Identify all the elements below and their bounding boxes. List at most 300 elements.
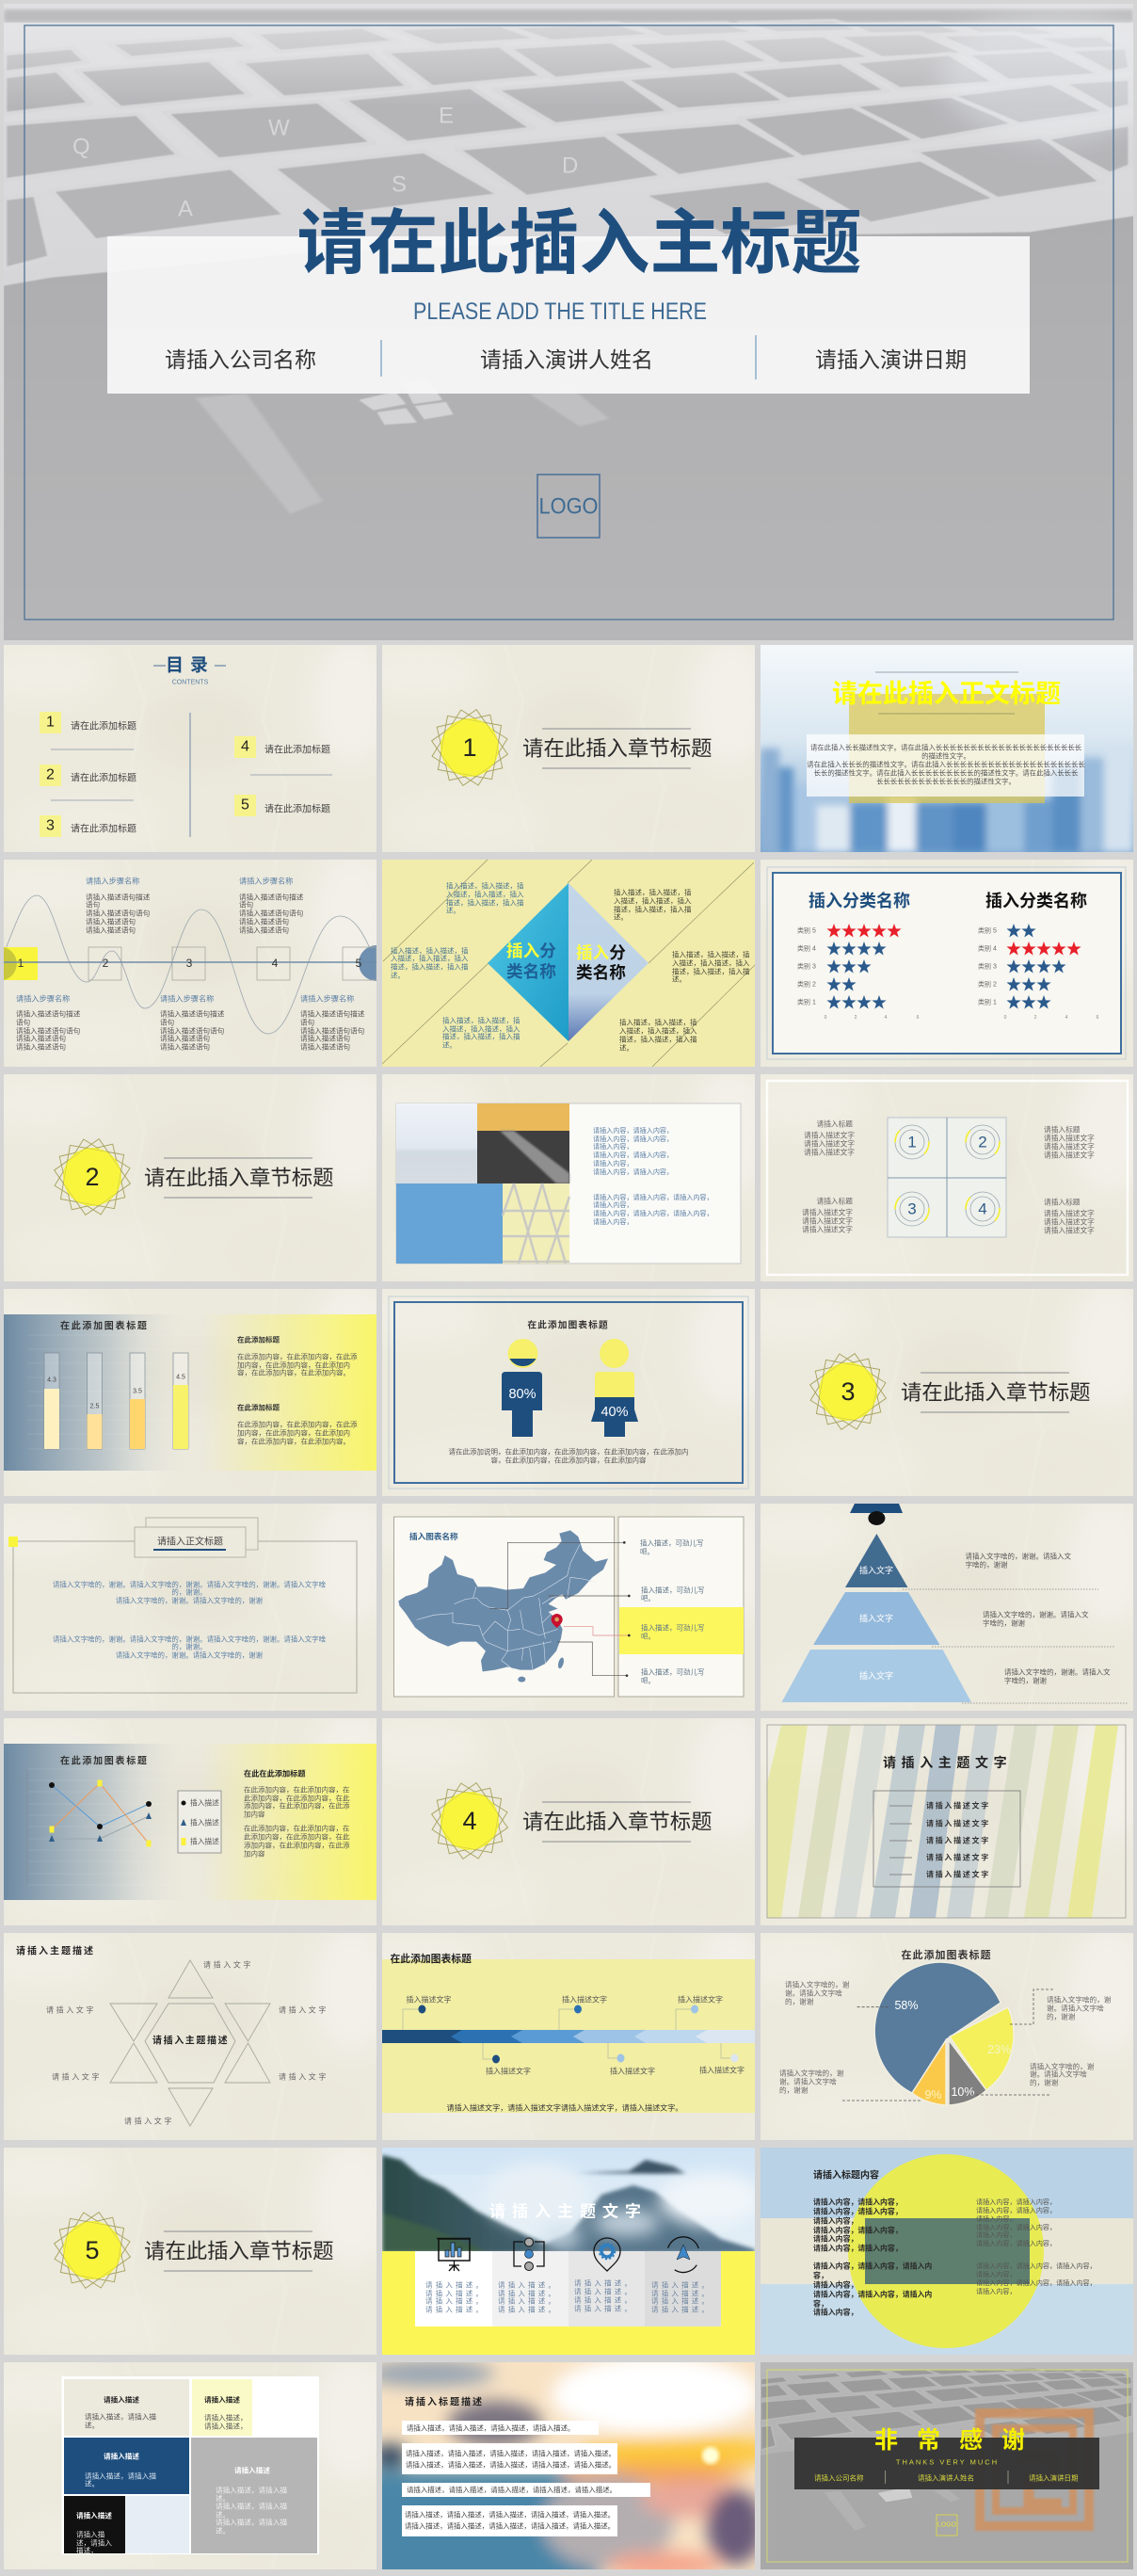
wave line [4,895,376,1034]
description blocks: 插入描述，插入描述，插 [446,881,524,891]
contents items: 请在此添加标题 [264,802,330,815]
side text: 添加内容，在此添加内容，在此添 [244,1800,350,1810]
icon: navigation cycle [666,2234,702,2275]
milestones [403,1994,745,2075]
map title: 插入图表名称 [409,1531,458,1541]
highlight block [619,1607,744,1654]
map callouts: 插入描述，可劲儿写 [641,1666,704,1676]
step text blocks: 请插入描述语句 [300,1034,350,1043]
leader lines [903,1589,1129,1703]
card text: 请插入描述。 [574,2286,634,2295]
side text: 容，在此添加内容，在此添加内容。 [237,1367,350,1377]
pyramid levels: 插入文字 [859,1613,893,1623]
rating chart: left: 插入分类名称 [809,892,910,910]
description blocks: 述。 [619,1043,633,1053]
panel: framed body text [0,1494,394,1711]
card text [425,2278,712,2314]
side text: 此添加内容，在此添加内容，在此 [244,1793,350,1802]
callout text: 请插入文字啥的，谢 [779,2068,844,2077]
block: grey: 述。 [216,2510,230,2520]
photo tiles [396,1103,569,1264]
side text: 添加内容，在此添加内容，在此添 [244,1840,350,1849]
panel: diagonal stripes list [732,1709,1137,1925]
rating chart: right: 类别 2 [978,979,997,989]
contents items: 5 [241,797,249,813]
point labels: 请插入文字 [46,2005,96,2015]
description blocks: 入描述，插入描述，插入 [391,953,469,962]
right text: 请插入内容，请插入内容，请插入内容， [976,2278,1097,2287]
section title: 请在此插入章节标题 [144,2239,334,2263]
block: pale yellow: 请插入描述 [204,2395,240,2405]
contents items: 请在此添加标题 [264,744,330,755]
right text: 请插入内容，请插入内容， [976,2198,1056,2206]
right text: 请插入内容， [976,2230,1017,2239]
quadrant labels: 请插入标题 [1044,1198,1081,1207]
block: navy: 请插入描述，请插入描 [85,2471,156,2480]
list box: 请插入描述文字 [926,1853,990,1862]
cards [415,2251,721,2326]
step text blocks: 语句 [239,900,253,910]
text rows: 请插入描述，请插入描述，请插入描述，请插入描述，请插入描述。 [407,2485,617,2494]
title card [107,236,1030,394]
milestones: 插入描述文字 [678,1994,723,2004]
photo: laptop keyboard: S [392,171,407,198]
left text: 请插入内容， [813,2280,857,2290]
step text blocks [16,876,365,1051]
card text: 请插入描述。 [425,2305,486,2314]
rating chart: left: 类别 1 [797,998,816,1006]
block: grey: 请插入描述，请插入描 [216,2501,287,2510]
callout leaders [842,1989,1055,2101]
chart title: 在此添加图表标题 [527,1318,609,1331]
left text: 请插入内容，请插入内容， [813,2243,903,2252]
thanks subtitle: THANKS VERY MUCH [896,2457,999,2467]
step text blocks: 请插入描述语句语句 [160,1026,224,1036]
card text: 请插入描述。 [425,2295,486,2305]
legend: 插入描述 [190,1836,219,1845]
callout text: 的，谢谢 [785,1996,814,2005]
level descriptions: 字啥的，谢谢 [966,1559,1008,1569]
text blocks: 请插入内容，请插入内容，请插入内容， [593,1209,713,1217]
side text: 在此添加内容，在此添加内容，在 [244,1785,350,1795]
step text blocks: 请插入描述语句 [300,1041,350,1051]
quadrant labels: 请插入描述文字 [1044,1226,1095,1235]
panel: hexagram [0,1924,394,2140]
right text: 请插入内容， [976,2214,1017,2223]
hexagram outline [110,1960,270,2126]
quadrant labels: 请插入标题 [817,1196,853,1205]
body text: 请在此插入长长描述性文字。请在此插入长长长长长长长长长长长长长长长长长长长长长 [810,744,1082,751]
block: grey: 请插入描述 [234,2465,270,2474]
card text: 请插入描述。 [651,2280,712,2290]
body text [807,744,1085,785]
figure: female 40% [591,1339,638,1437]
panel: mountain icons [382,2148,763,2355]
text rows [402,2421,650,2536]
rating chart: left: 4 [885,1015,888,1021]
block: pale yellow: 请插入描述， [204,2422,248,2431]
card text: 请插入描述。 [498,2288,558,2297]
block: grey: 请插入描述，请插入描 [216,2486,287,2495]
contents items [40,712,332,837]
section title: 请在此插入章节标题 [144,1166,334,1190]
callout text: 请插入文字啥的，谢 [1030,2062,1095,2071]
block: pale blue [125,2496,189,2553]
left text: 容， [813,2271,828,2280]
card text: 请插入描述。 [651,2295,712,2305]
badge: number 4 [432,1783,507,1859]
rating chart: left: 0 [825,1015,827,1021]
description blocks: 入描述，插入描述，插入 [619,1026,697,1036]
heading: contents: CONTENTS [172,680,209,685]
block: paper: 述。 [85,2420,99,2429]
rating chart: left [797,892,920,1021]
contents items: 请在此添加标题 [71,719,136,733]
block: navy: 请插入描述 [104,2452,139,2461]
side text: 在此添加标题 [237,1335,280,1344]
block: grey [191,2438,317,2553]
diamond graphic: 类名称 [576,963,626,982]
step text blocks: 语句 [300,1017,314,1026]
text rows: 请插入描述，请插入描述，请插入描述，请插入描述，请插入描述。 [405,2521,615,2531]
callout text: 谢。请插入文字啥 [785,1988,842,1998]
presenter details: 请插入公司名称 [814,2472,864,2482]
step text blocks: 语句 [160,1017,174,1026]
description blocks [391,881,750,1053]
rating chart: left: 类别 3 [797,962,816,970]
heading: contents: 目录 [166,655,215,676]
step text blocks: 请插入描述语句描述 [239,893,304,902]
step text blocks: 请插入描述语句语句 [16,1026,80,1036]
map callouts: 插入描述，可劲儿写 [641,1623,704,1633]
chart title: 在此添加图表标题 [60,1755,149,1766]
quadrant grid: 1 [907,1134,917,1151]
milestones: 插入描述文字 [610,2066,655,2075]
text blocks: 请插入内容，请插入内容， [593,1151,673,1159]
text blocks: 请插入内容，请插入内容， [593,1126,673,1135]
callout text: 谢。请插入文字啥 [1030,2069,1087,2079]
presenter details: 请插入演讲日期 [815,347,967,372]
card text: 请插入描述。 [651,2305,712,2314]
card text: 请插入描述。 [574,2295,634,2305]
badge: number 4: 4 [462,1807,477,1835]
text block: 的，谢谢。 [171,1587,207,1597]
presenter details [165,335,967,379]
text rows: 请插入描述，请插入描述，请插入描述，请插入描述，请插入描述。 [406,2459,616,2469]
panel: sunset text rows [363,2356,787,2576]
side text: 在此添加标题 [237,1403,280,1412]
quadrant labels: 请插入描述文字 [804,1130,855,1139]
text blocks: 请插入内容， [593,1217,633,1226]
side text: 加内容 [244,1810,265,1819]
description blocks: 入描述，插入描述，插入 [446,889,524,898]
level descriptions: 请插入文字啥的，谢谢。请插入文 [983,1610,1089,1619]
milestones: 插入描述文字 [486,2066,531,2075]
rating chart: right: 6 [1097,1015,1099,1021]
step text blocks: 请插入描述语句描述 [86,893,151,902]
badge: number 5 [55,2213,130,2288]
subtitle: PLEASE ADD THE TITLE HERE [413,298,707,325]
pie labels [894,1999,1011,2101]
contents items: 4 [241,738,249,755]
slide title: 请在此插入正文标题 [832,680,1061,708]
block: paper: 请插入描述，请插入描 [85,2412,156,2422]
step text blocks: 请插入步骤名称 [239,876,293,885]
photo: misty mountains [382,2148,763,2253]
rating chart: left: 类别 5 [797,926,816,934]
section title: 请在此插入章节标题 [522,736,713,761]
side text [244,1768,350,1859]
quadrant labels: 请插入描述文字 [1044,1216,1095,1226]
side text: 在此添加内容，在此添加内容，在此添 [237,1420,358,1429]
section title: 请在此插入章节标题 [901,1380,1091,1405]
description blocks: 插入描述，插入描述，插 [614,887,692,896]
description blocks: 插入描述，插入描述，插 [672,949,750,958]
panel: section 5 [0,2138,394,2355]
yellow block [849,694,1045,803]
right text: 请插入内容，请插入内容， [976,2223,1056,2231]
chart title: 在此添加图表标题 [902,1948,992,1961]
diamond graphic: 类名称 [506,962,556,981]
callout text: 请插入文字啥的，谢 [1047,1994,1112,2004]
quadrant labels: 请插入描述文字 [1044,1151,1095,1160]
list box: 请插入描述文字 [926,1800,990,1810]
panel: section 4 [354,1709,773,1925]
orange stamp [980,2413,1089,2526]
description blocks: 述。 [391,970,405,979]
photo: laptop keyboard: E [439,104,454,128]
block: navy: 述。 [85,2478,99,2487]
panel: diamond categories [382,860,755,1067]
description blocks: 描述，插入描述，插入描 [672,966,750,975]
text block: 请插入文字啥的，谢谢。请插入文字啥的，谢谢。请插入文字啥的，谢谢。请插入文字啥 [53,1634,327,1644]
card text: 请插入描述。 [498,2305,558,2314]
quadrant labels: 请插入描述文字 [1044,1141,1095,1151]
body text: 的描述性文字。 [921,751,970,761]
panel: city body text [761,645,1133,852]
quadrant labels: 请插入描述文字 [804,1139,855,1149]
caption: 请插入描述文字，请插入描述文字请插入描述文字，请插入描述文字。 [447,2103,682,2113]
quadrant labels [802,1119,1095,1235]
block: pale yellow: 请插入描述， [204,2412,248,2422]
step text blocks: 请插入描述语句描述 [300,1009,365,1019]
callout text: 请插入文字啥的，谢 [785,1979,850,1988]
contents items: 请在此添加标题 [71,772,136,783]
card text: 请插入描述。 [425,2280,486,2290]
quadrant labels: 请插入描述文字 [802,1207,853,1216]
panel: people percentage chart [354,1280,773,1496]
badge: number 2 [55,1139,130,1215]
text card [807,734,1084,797]
yellow footer [382,2251,755,2355]
photo: laptop keyboard: Q [72,134,90,160]
panel: wave process [0,850,394,1067]
heading: 在此添加图表标题 [390,1952,472,1965]
step text blocks: 请插入步骤名称 [86,876,139,885]
quadrant labels: 请插入描述文字 [1044,1134,1095,1143]
dark overlay [865,2218,1030,2284]
stripes [767,1725,1118,1918]
point labels: 请插入文字 [52,2071,102,2081]
photo: city buildings [761,749,1133,852]
description blocks: 插入描述，插入描述，插 [391,945,469,955]
rating chart: right: 类别 1 [978,998,997,1006]
block: black: 请插入描 [76,2529,105,2538]
description blocks: 述。 [672,974,686,983]
logo box: LOGO [937,2521,957,2529]
step text blocks: 请插入描述语句描述 [16,1009,81,1019]
map callouts: 吧。 [641,1594,655,1602]
photo: blurred sunset [363,2356,787,2576]
card text: 请插入描述。 [651,2288,712,2297]
panel: section 2 [0,1065,394,1281]
map callouts: 插入描述，可劲儿写 [641,1586,704,1595]
body text: 长长长长长长长长长长长长长的描述性文字。 [876,778,1016,785]
panel: star ratings [732,850,1137,1067]
legend: 插入描述 [190,1798,219,1808]
pie labels: 58% [894,1999,919,2012]
step text blocks: 请插入描述语句 [160,1034,210,1043]
rating chart: left: 类别 2 [797,979,816,989]
rating chart: left: 6 [917,1015,920,1021]
callout text: 谢。请插入文字啥 [779,2077,837,2086]
left text: 请插入内容，请插入内容，请插入内 [813,2262,932,2271]
line chart [27,1769,173,1885]
step markers: 2 [103,957,109,970]
description blocks: 描述，插入描述，插入描 [446,898,524,908]
diagonal lines [382,860,755,1067]
logo box [537,475,600,538]
map of China [398,1530,631,1682]
bar chart: 2.5 [90,1403,99,1410]
description blocks: 入描述，插入描述，插入 [442,1024,520,1034]
card text: 请插入描述。 [425,2288,486,2297]
rating chart: right: 类别 5 [978,926,997,934]
quadrant grid: 3 [907,1199,917,1218]
side text: 加内容，在此添加内容，在此添加内 [237,1360,350,1369]
panel: photo collage [354,1065,773,1281]
text block: 请插入文字啥的，谢谢。请插入文字啥的，谢谢。请插入文字啥的，谢谢。请插入文字啥 [53,1580,327,1589]
badge: number 3 [810,1354,886,1429]
right text: 请插入内容，请插入内容， [976,2206,1056,2214]
point labels: 请插入文字 [124,2117,174,2126]
quadrant labels: 请插入标题 [817,1119,853,1128]
map callouts: 插入描述，可劲儿写 [640,1538,704,1548]
figure: male 80%: 80% [508,1387,536,1402]
photo: laptop keyboard: D [562,153,578,179]
step text blocks: 请插入描述语句 [86,925,136,934]
text rows: 请插入描述，请插入描述，请插入描述，请插入描述，请插入描述。 [406,2448,616,2457]
legend: 插入描述 [190,1817,219,1827]
text block: 请插入文字啥的，谢谢。请插入文字啥的，谢谢 [116,1650,264,1659]
step markers: 3 [186,957,193,970]
caption [448,1446,689,1465]
photo: dark keyboard [761,2368,1134,2574]
bar chart: 4.5 [176,1375,185,1380]
yellow circle [848,2154,1044,2348]
step text blocks: 请插入描述语句 [16,1034,66,1043]
panel: pyramid [732,1494,1137,1711]
text block: 请插入文字啥的，谢谢。请插入文字啥的，谢谢 [116,1595,264,1604]
panel: bar chart [0,1280,394,1496]
callout text: 的，谢谢 [1030,2077,1059,2086]
description blocks: 述。 [442,1039,456,1049]
contents items: 1 [46,714,55,731]
bar chart [27,1335,206,1449]
block: pale yellow [192,2379,252,2436]
map callouts [640,1538,704,1685]
side text: 加内容 [244,1849,265,1859]
text blocks: 请插入内容， [593,1159,633,1167]
icon: presentation board [437,2239,471,2271]
photo: laptop keyboard: A [178,196,193,222]
badge: number 1 [432,710,507,785]
left text: 请插入内容，请插入内容， [813,2207,903,2216]
frame [767,2370,1128,2562]
rating chart: left: 2 [855,1015,857,1021]
step text blocks: 请插入描述语句语句 [239,908,303,917]
step text blocks: 请插入描述语句 [239,917,289,926]
left text: 请插入内容， [813,2216,857,2226]
text blocks [593,1126,713,1226]
quadrant labels: 请插入描述文字 [802,1224,853,1233]
block: black: 述，请插入 [76,2538,112,2548]
figure: male 80% [502,1339,542,1437]
list box: 请插入描述文字 [926,1836,990,1845]
block: paper [64,2379,189,2436]
quadrant grid: 2 [978,1134,987,1151]
description blocks: 入描述，插入描述，插入 [614,896,692,906]
pie labels: 23% [987,2043,1011,2056]
panel: thank you slide [761,2362,1134,2574]
step text blocks: 请插入描述语句 [239,925,289,934]
lamp cap [850,1504,903,1525]
center label: 请插入主题描述 [152,2034,229,2047]
text blocks: 请插入内容， [593,1142,633,1151]
icon: location gear [594,2238,620,2271]
rating chart: right: 类别 3 [978,962,997,970]
presenter details: 请插入公司名称 [165,347,316,372]
step text blocks: 请插入描述语句 [86,917,136,926]
panel: timeline [354,1924,773,2140]
outer frame [24,25,1113,620]
text blocks: 请插入内容，请插入内容， [593,1167,673,1176]
card text: 请插入描述。 [574,2303,634,2312]
callout text: 谢。请插入文字啥 [1047,2004,1104,2013]
rating chart: left: 类别 4 [797,943,816,953]
description blocks: 述。 [446,906,460,915]
body text: 请在此插入长长长的描述性文字。请在此插入长长长长长长长长长长长长长长长长长长长长 [807,761,1085,768]
step text blocks: 请插入步骤名称 [16,994,70,1004]
panel: section 3 [732,1280,1137,1496]
level descriptions: 请插入文字啥的，谢谢。请插入文 [966,1552,1071,1561]
legend [178,1791,221,1853]
block: black: 描述， [76,2546,98,2555]
rating chart: right [978,892,1099,1021]
side text: 在此在此添加标题 [244,1768,306,1778]
figure: female 40%: 40% [601,1405,629,1420]
step text blocks: 请插入描述语句 [160,1041,210,1051]
text blocks: 请插入内容，请插入内容，请插入内容， [593,1193,713,1201]
photo: laptop keyboard [4,8,1133,574]
step text blocks: 请插入步骤名称 [300,994,354,1004]
quadrant labels: 请插入描述文字 [802,1216,853,1226]
bar chart: 3.5 [133,1388,142,1395]
right text [976,2198,1097,2295]
card text: 请插入描述。 [498,2295,558,2305]
dark banner [794,2438,1099,2489]
quadrant labels: 请插入描述文字 [1044,1209,1095,1218]
